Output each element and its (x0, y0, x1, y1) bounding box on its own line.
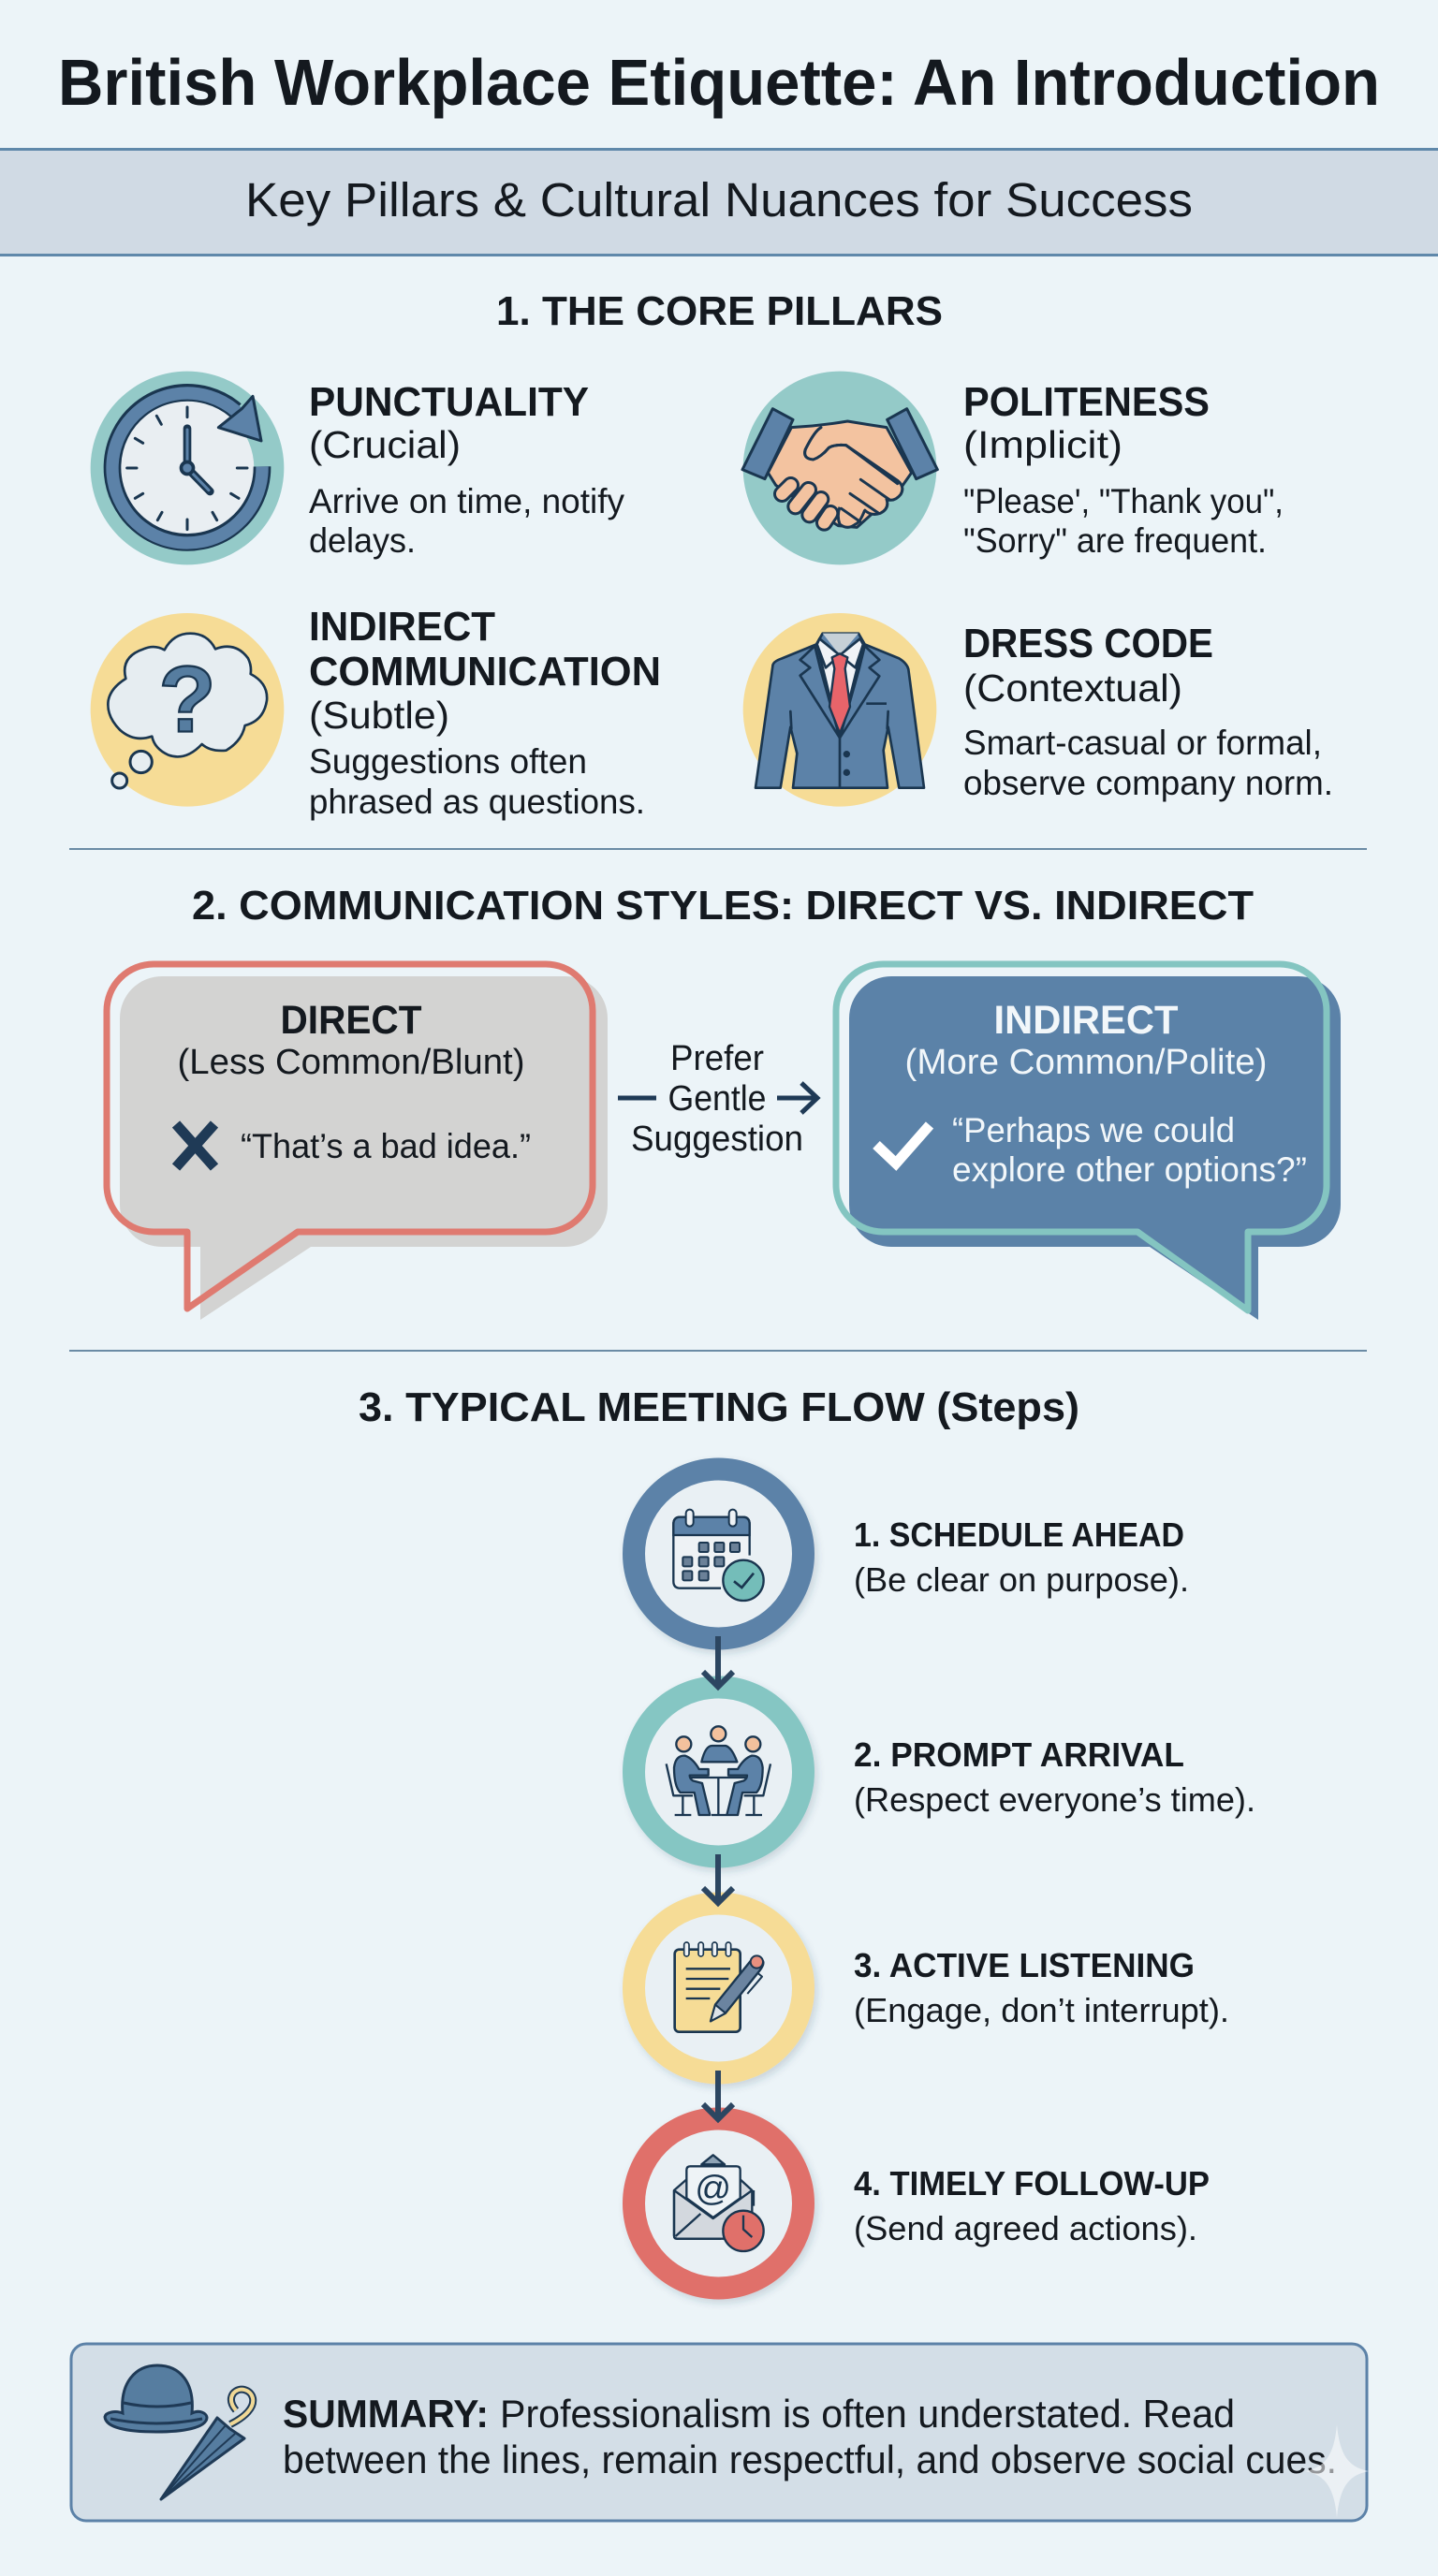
step 4: timely follow-up (634, 2119, 1210, 2288)
speech bubble: direct (107, 964, 608, 1320)
step 3: active listening (634, 1904, 1229, 2072)
panel: summary (71, 2344, 1367, 2521)
speech bubble: direct: “That’s a bad idea.” (241, 1127, 531, 1165)
summary text: between the lines, remain respectful, and observe social cues. (283, 2437, 1337, 2481)
icon: suit jacket (743, 613, 936, 807)
label: punctuality: PUNCTUALITY (309, 379, 589, 425)
speech bubble: indirect (836, 964, 1341, 1320)
label: indirect communication: COMMUNICATION (309, 649, 661, 695)
arrow: step 3 to 4 (703, 2071, 733, 2119)
arrow: step 2 to 3 (703, 1854, 733, 1903)
panel: communication styles (107, 883, 1341, 1320)
icon: handshake (742, 372, 937, 564)
icon: umbrella (161, 2390, 253, 2499)
icon: check mark (876, 1125, 930, 1164)
speech bubble: indirect: INDIRECT (994, 998, 1178, 1043)
step note: (Send agreed actions). (854, 2209, 1197, 2247)
connector: prefer gentle suggestion (618, 1039, 817, 1159)
icon: bowler hat (105, 2365, 207, 2432)
pillar: politeness (742, 372, 1284, 564)
description: politeness (963, 482, 1284, 560)
connector: prefer gentle suggestion: Gentle (668, 1079, 766, 1119)
step note: (Respect everyone’s time). (854, 1780, 1255, 1819)
description: indirect: Suggestions often (309, 742, 587, 781)
panel: core pillars (91, 288, 1333, 821)
icon: thought cloud (91, 613, 284, 807)
step 2: prompt arrival (634, 1687, 1255, 1857)
icon: cross (176, 1124, 214, 1167)
title: British Workplace Etiquette: An Introduction (58, 46, 1380, 119)
subtitle band: Key Pillars & Cultural Nuances for Success (245, 173, 1193, 227)
icon: meeting ring (634, 1687, 803, 1857)
speech bubble: indirect: (More Common/Polite) (904, 1043, 1268, 1082)
description: dress code: observe company norm. (963, 764, 1333, 802)
label: indirect communication: INDIRECT (309, 604, 495, 650)
note: contextual: (Contextual) (963, 666, 1182, 710)
step 1: schedule ahead (634, 1470, 1189, 1638)
sparkle watermark (1305, 2424, 1369, 2518)
connector: prefer gentle suggestion: Prefer (670, 1039, 764, 1078)
step label: 4. TIMELY FOLLOW-UP (854, 2164, 1210, 2203)
note: implicit: (Implicit) (963, 423, 1123, 466)
step label: 3. ACTIVE LISTENING (854, 1946, 1195, 1984)
heading: communication styles: 2. COMMUNICATION STYLES: DIRECT VS. INDIRECT (192, 883, 1254, 929)
summary text: SUMMARY: (283, 2392, 489, 2436)
heading: meeting flow: 3. TYPICAL MEETING FLOW (Steps) (359, 1384, 1079, 1430)
icon: envelope ring: @ (695, 2169, 731, 2209)
heading: core pillars: 1. THE CORE PILLARS (496, 288, 943, 334)
description: dress code (963, 724, 1333, 802)
pillar: dress code (743, 613, 1333, 807)
step label: 2. PROMPT ARRIVAL (854, 1735, 1184, 1774)
summary text (283, 2392, 1337, 2481)
description: indirect (309, 742, 645, 821)
step note: (Engage, don’t interrupt). (854, 1991, 1229, 2029)
pillar: indirect communication (91, 604, 661, 821)
speech bubble: direct: (Less Common/Blunt) (178, 1043, 524, 1082)
description: indirect: phrased as questions. (309, 783, 645, 821)
icon: thought cloud: ? (158, 648, 216, 753)
description: punctuality: delays. (309, 521, 416, 560)
description: punctuality (309, 482, 624, 560)
speech bubble: indirect: explore other options?” (952, 1150, 1307, 1189)
subtitle band (0, 148, 1438, 256)
description: politeness: "Please', "Thank you", (963, 482, 1284, 520)
description: politeness: "Sorry" are frequent. (963, 521, 1267, 560)
speech bubble: indirect: “Perhaps we could (952, 1111, 1235, 1149)
arrow: step 1 to 2 (703, 1636, 733, 1687)
speech bubble: direct: DIRECT (281, 998, 421, 1043)
icon: clock (91, 372, 284, 564)
description: punctuality: Arrive on time, notify (309, 482, 624, 520)
label: dress code: DRESS CODE (963, 621, 1213, 666)
step label: 1. SCHEDULE AHEAD (854, 1515, 1184, 1554)
connector: prefer gentle suggestion: Suggestion (631, 1120, 803, 1159)
pillar: punctuality (91, 372, 624, 564)
panel: meeting flow (359, 1384, 1255, 2288)
summary text: Professionalism is often understated. Read (500, 2392, 1235, 2436)
note: subtle: (Subtle) (309, 694, 449, 737)
step note: (Be clear on purpose). (854, 1560, 1189, 1599)
icon: notepad ring (634, 1904, 803, 2072)
icon: calendar ring (634, 1470, 803, 1638)
label: indirect communication (309, 604, 661, 695)
note: crucial: (Crucial) (309, 423, 461, 466)
description: dress code: Smart-casual or formal, (963, 724, 1322, 762)
icon: envelope ring (634, 2119, 803, 2288)
label: politeness: POLITENESS (963, 379, 1210, 425)
